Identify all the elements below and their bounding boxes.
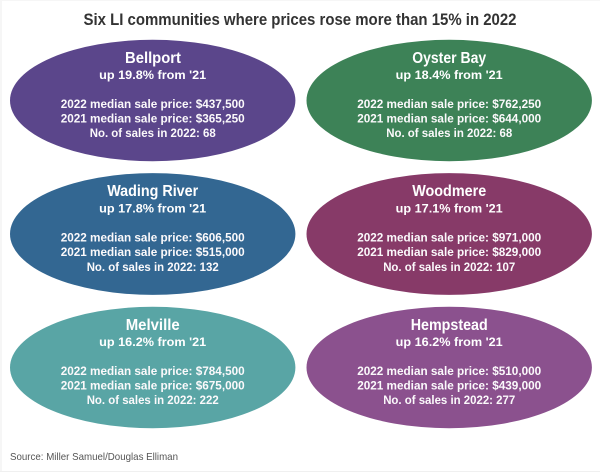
panel: Bellport: Bellport xyxy=(125,50,181,67)
panel: Hempstead: up 16.2% from '21 xyxy=(396,335,503,349)
panel: Oyster Bay: 2021 median sale price: $644,000 xyxy=(357,112,541,126)
panel: Woodmere: 2022 median sale price: $971,000 xyxy=(357,230,541,244)
panel: Bellport xyxy=(10,40,295,161)
panel: Wading River: 2022 median sale price: $606,500 xyxy=(61,230,245,244)
source note: Source: Miller Samuel/Douglas Elliman xyxy=(10,451,178,463)
panel: Hempstead xyxy=(306,307,592,428)
panel: Oyster Bay: 2022 median sale price: $762,250 xyxy=(357,97,541,111)
title: Six LI communities where prices rose more than 15% in 2022 xyxy=(84,11,516,29)
panel: Melville: 2022 median sale price: $784,500 xyxy=(61,364,245,378)
panel: Wading River: up 17.8% from '21 xyxy=(99,202,206,216)
panel: Woodmere: No. of sales in 2022: 107 xyxy=(383,260,515,274)
panel: Wading River: 2021 median sale price: $515,000 xyxy=(61,245,245,259)
panel: Woodmere: up 17.1% from '21 xyxy=(396,202,503,216)
panel: Wading River: Wading River xyxy=(107,183,198,200)
panel: Hempstead: No. of sales in 2022: 277 xyxy=(383,393,515,407)
panel: Oyster Bay: No. of sales in 2022: 68 xyxy=(386,126,512,140)
panel: Melville: No. of sales in 2022: 222 xyxy=(87,393,219,407)
panel: Melville: Melville xyxy=(126,317,180,334)
panel: Bellport: No. of sales in 2022: 68 xyxy=(90,126,216,140)
panel: Oyster Bay: Oyster Bay xyxy=(412,50,487,67)
panel: Wading River: No. of sales in 2022: 132 xyxy=(87,260,219,274)
panel: Woodmere xyxy=(306,173,592,295)
panel: Melville: 2021 median sale price: $675,000 xyxy=(61,378,245,392)
panel: Woodmere: 2021 median sale price: $829,000 xyxy=(357,245,541,259)
panel: Hempstead: 2021 median sale price: $439,000 xyxy=(357,378,541,392)
panel: Melville: up 16.2% from '21 xyxy=(99,335,206,349)
panel: Bellport: up 19.8% from '21 xyxy=(99,68,206,82)
panel: Melville xyxy=(10,307,295,428)
panel: Hempstead: 2022 median sale price: $510,000 xyxy=(357,364,541,378)
panel: Woodmere: Woodmere xyxy=(412,183,487,200)
panel: Oyster Bay: up 18.4% from '21 xyxy=(396,68,503,82)
panel: Bellport: 2021 median sale price: $365,250 xyxy=(61,112,245,126)
panel: Oyster Bay xyxy=(306,40,592,161)
panel: Hempstead: Hempstead xyxy=(411,317,488,334)
panel: Wading River xyxy=(10,173,295,295)
panel: Bellport: 2022 median sale price: $437,500 xyxy=(61,97,245,111)
